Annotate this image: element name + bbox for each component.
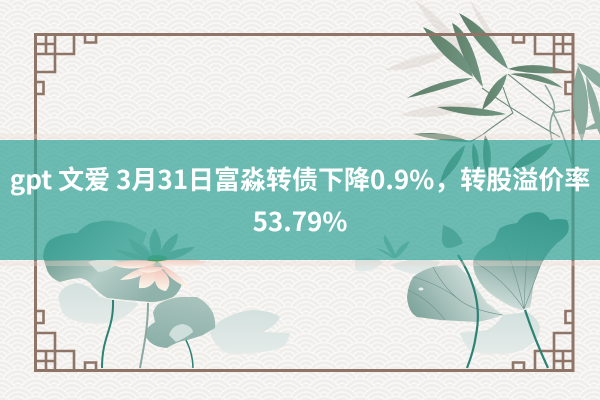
- pale lotus leaves: [58, 258, 540, 354]
- right lotus lower leaf: [407, 265, 503, 322]
- lotus bud: [442, 225, 463, 248]
- headline: 53.79%: [253, 202, 347, 239]
- faded bamboo shadow: [385, 0, 500, 117]
- faded right bamboo cluster: [545, 63, 600, 175]
- bamboo leaves: [407, 13, 570, 183]
- right lotus stems: [458, 255, 548, 368]
- small far flower: [375, 235, 410, 258]
- headline: [10, 160, 590, 239]
- left lotus stems: [102, 300, 193, 368]
- bamboo stems: [470, 74, 560, 142]
- headline: gpt 文爱 3月31日富淼转债下降0.9%，转股溢价率: [10, 160, 590, 197]
- frame: [36, 34, 573, 370]
- right lotus fan leaf: [473, 212, 569, 310]
- small leaf highlight: [169, 324, 193, 342]
- band edge tint: [0, 134, 600, 266]
- left lotus leaf: [43, 220, 182, 302]
- lotus flower: [110, 228, 207, 291]
- small lotus leaf: [145, 297, 215, 348]
- teal title band: [0, 140, 600, 260]
